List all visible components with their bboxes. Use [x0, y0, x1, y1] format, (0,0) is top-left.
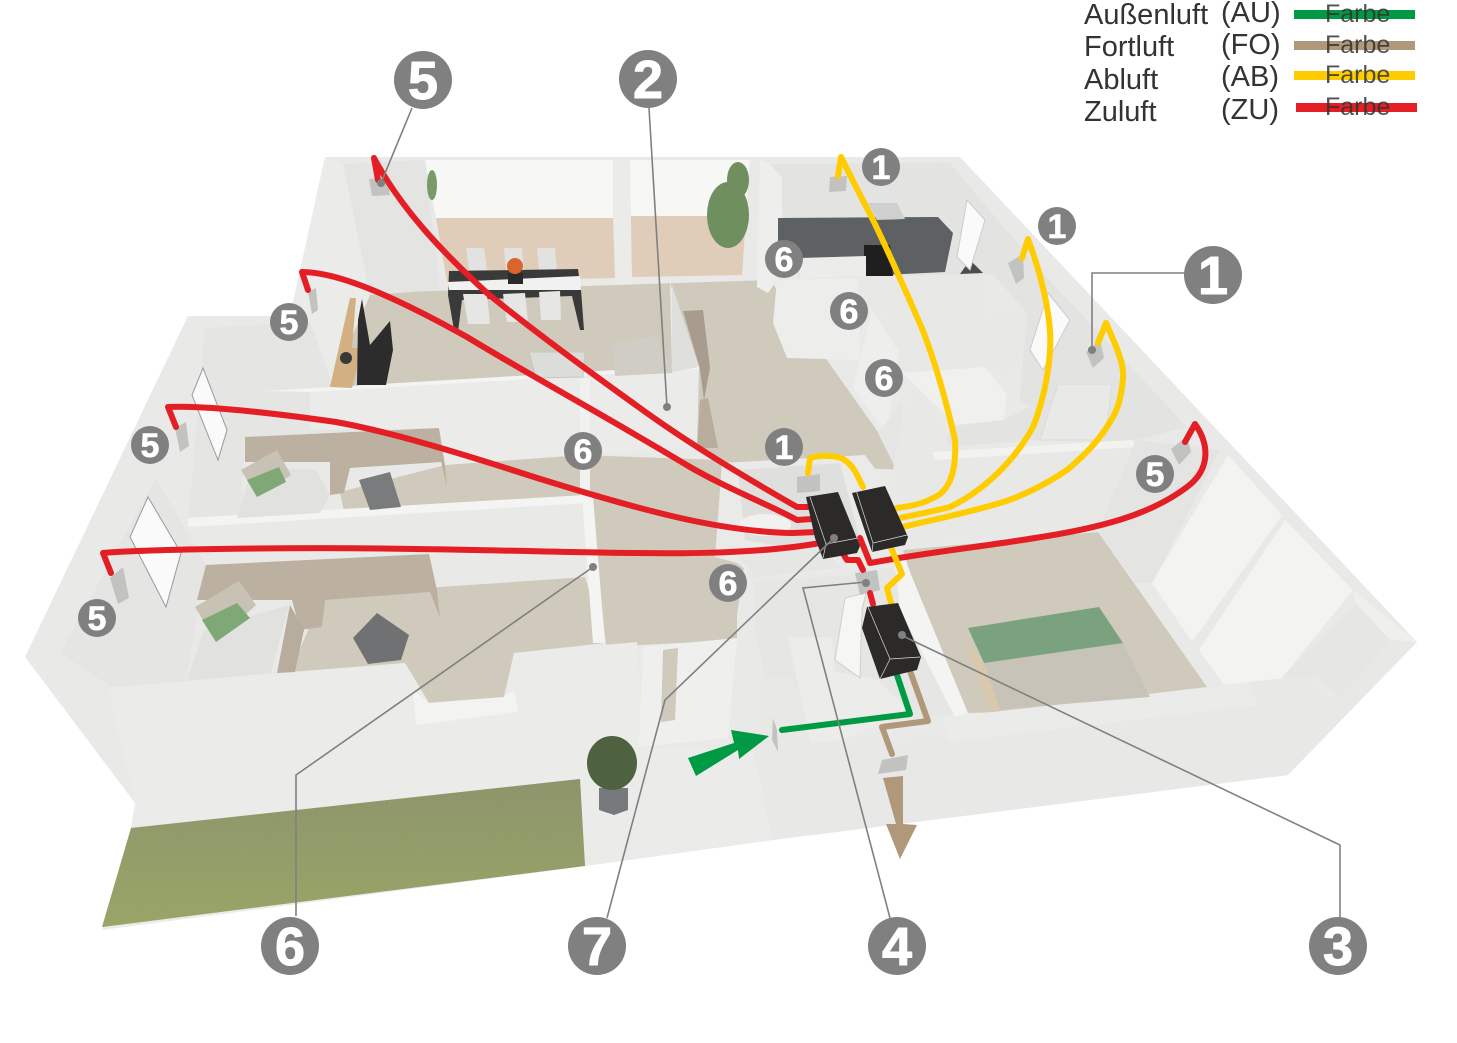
legend: Farbe — [1325, 61, 1390, 89]
floor plan: building — [25, 157, 1417, 930]
legend: Farbe — [1325, 93, 1390, 121]
duct: outgoing air brown — [882, 668, 928, 754]
large number badges: 7 — [582, 917, 612, 977]
hall wall with top band — [310, 367, 699, 465]
front left wall — [108, 642, 643, 803]
leader lines — [296, 108, 1340, 918]
small number badges: 6 — [775, 241, 793, 279]
large number badges: 5 — [408, 51, 438, 111]
heat unit — [835, 593, 866, 678]
small number badges: 6 — [574, 433, 592, 471]
kitchen counter — [778, 217, 953, 276]
small number badges: 1 — [775, 429, 793, 467]
bed master — [964, 607, 1150, 710]
kitchen window — [957, 200, 985, 270]
small number badges: 5 — [88, 600, 106, 638]
front wall mass — [753, 640, 1417, 840]
outer shell — [25, 157, 1417, 866]
cube stool upper — [359, 472, 401, 510]
legend: Abluft — [1084, 64, 1158, 96]
terrace paving — [436, 218, 615, 282]
legend: Zuluft — [1084, 96, 1157, 128]
arrow: outside air inlet — [688, 730, 769, 776]
tree pot — [587, 736, 637, 815]
legend: (AB) — [1221, 61, 1279, 93]
island counter — [800, 256, 866, 278]
large number badges: 2 — [633, 50, 663, 110]
small number badges: 5 — [141, 427, 159, 465]
large number badges: 6 — [275, 917, 305, 977]
wall vents — [110, 176, 1191, 774]
bathroom walls block — [893, 388, 1136, 543]
back glazing — [425, 160, 613, 218]
bed upper bedroom — [237, 450, 330, 518]
dining set — [448, 248, 584, 332]
small number badges: 5 — [280, 304, 298, 342]
bedroom side walls — [188, 322, 440, 523]
duct: exhaust air yellow — [808, 157, 1123, 603]
toilet — [739, 514, 791, 536]
large number badges: 3 — [1323, 917, 1353, 977]
master bedroom glazing — [1152, 455, 1282, 642]
device: distribution box supply — [806, 492, 860, 559]
arrow: exhaust outlet — [883, 776, 917, 859]
sofa — [612, 336, 672, 376]
lawn — [102, 779, 585, 927]
cube stool lower — [353, 613, 409, 664]
small number badges: 6 — [719, 565, 737, 603]
bath tub — [903, 367, 1007, 425]
small number badges: 6 — [840, 293, 858, 331]
duct: supply air red — [103, 158, 1205, 604]
small number badges: 5 — [1146, 456, 1164, 494]
tile floor utility — [737, 540, 842, 577]
device: distribution box exhaust — [852, 486, 908, 552]
interior left living wall — [343, 160, 440, 295]
small number badges: 1 — [872, 149, 890, 187]
bed lower bedroom — [187, 581, 304, 681]
kitchen partition walls — [798, 274, 990, 317]
cooker — [864, 245, 893, 276]
large number badges — [261, 50, 1367, 977]
coffee table — [529, 352, 585, 378]
small plant — [427, 170, 437, 200]
large number badges: 1 — [1198, 246, 1228, 306]
master bedroom side wall — [1098, 440, 1220, 583]
legend: (FO) — [1221, 29, 1281, 61]
device: ventilation unit — [862, 603, 921, 679]
large number badges: 4 — [882, 917, 912, 977]
legend: Fortluft — [1084, 31, 1174, 63]
terrace alcove — [1282, 603, 1390, 697]
paving strip — [102, 747, 773, 930]
bedroom divider wall — [188, 498, 585, 587]
kitchen walls — [770, 163, 1187, 442]
legend — [1084, 0, 1417, 128]
wood floors — [290, 280, 1207, 722]
utility hall room walls — [715, 455, 893, 577]
terrace plant — [707, 162, 749, 248]
shower glass — [1040, 384, 1112, 440]
small number badges — [78, 148, 1174, 638]
glazing pillar — [613, 158, 632, 284]
legend: (ZU) — [1221, 94, 1279, 126]
duct: outside air green — [782, 672, 910, 730]
utility room — [755, 567, 968, 730]
cooker hood — [868, 203, 905, 220]
legend: Farbe — [1325, 0, 1390, 28]
small number badges: 1 — [1048, 208, 1066, 246]
bath window — [1030, 293, 1070, 370]
small number badges: 6 — [875, 360, 893, 398]
left windows — [192, 368, 227, 460]
TV unit — [330, 298, 393, 388]
side cabinet — [683, 310, 710, 400]
desk upper bedroom — [245, 428, 447, 495]
bath tiles — [935, 402, 1073, 448]
legend: Farbe — [1325, 31, 1390, 59]
desk lower bedroom — [197, 554, 440, 630]
window ledge — [413, 690, 518, 725]
entrance door — [639, 638, 737, 747]
